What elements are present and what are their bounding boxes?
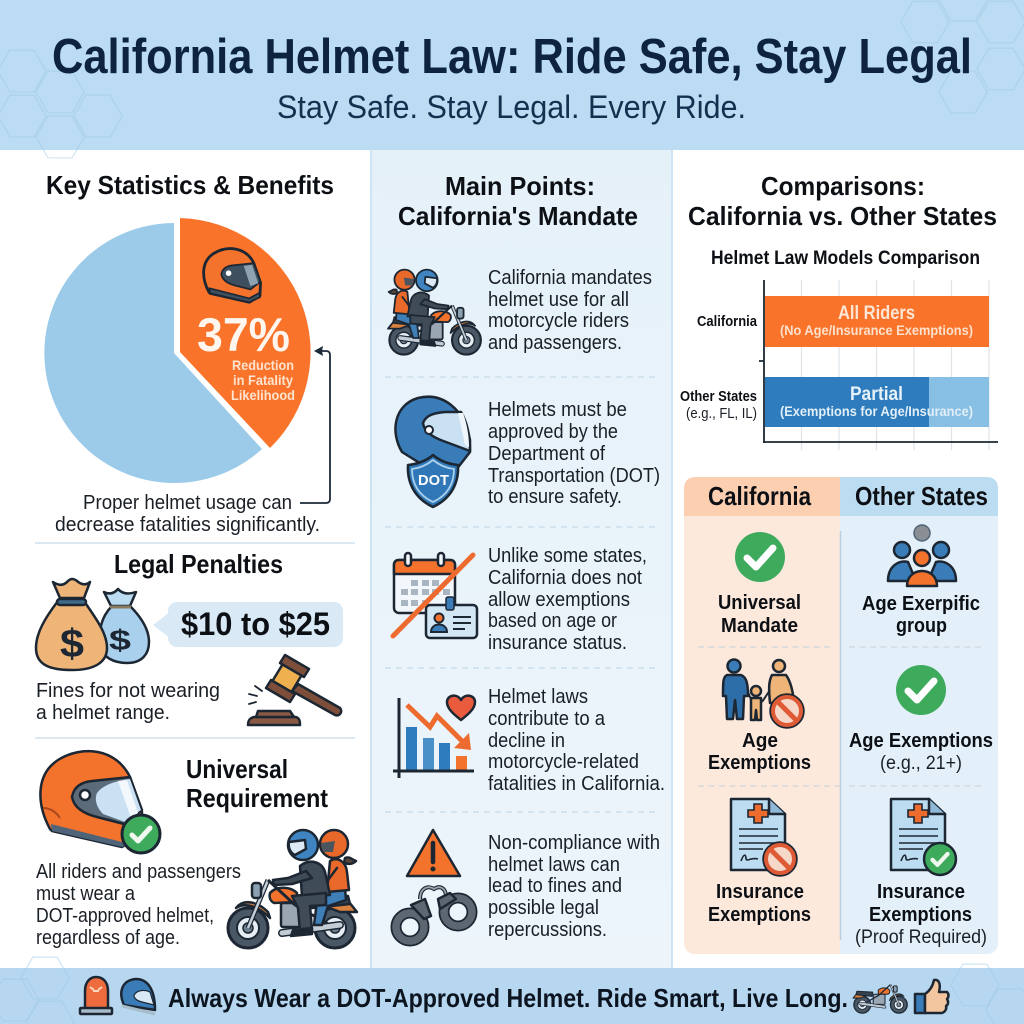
icon: money bags: $ [109, 625, 131, 657]
text: point 3: Unlike some states, [488, 545, 647, 567]
icon: motorcycle with riders [228, 830, 357, 948]
text: point 5: repercussions. [488, 919, 607, 941]
text: point 3: allow exemptions [488, 589, 630, 611]
label: insurance exemptions other states: (Proof Required) [855, 927, 987, 948]
stat caption: Reduction [232, 357, 294, 373]
text: point 5 [488, 832, 660, 941]
label: insurance exemptions other states: Exemptions [869, 904, 972, 926]
text: point 4: motorcycle-related [488, 751, 639, 773]
heading: main points: California's Mandate [398, 201, 638, 231]
label: insurance exemptions other states: Insurance [877, 881, 965, 903]
axis label: other states [680, 389, 757, 422]
label: age exemptions other states [849, 730, 993, 774]
text: fines description: Fines for not wearing [36, 680, 220, 702]
stat caption: in Fatality [233, 372, 293, 388]
icon: calendar and id card crossed out [393, 553, 477, 638]
icon: group of people [888, 525, 956, 586]
heading: comparisons: Comparisons: [761, 171, 925, 201]
text: point 2: to ensure safety. [488, 486, 622, 508]
text: point 4: fatalities in California. [488, 773, 665, 795]
label: age exemptions California: Age [742, 730, 778, 752]
callout: fine amount: $10 to $25 [181, 606, 330, 642]
text: point 2 [488, 399, 660, 508]
bar: California: (No Age/Insurance Exemptions) [780, 322, 973, 338]
text: helmet usage caption: decrease fatalities significantly. [55, 514, 320, 536]
text: point 1: helmet use for all [488, 289, 629, 311]
icon: helmet on pie [204, 249, 261, 302]
text: helmet usage caption: Proper helmet usage can [83, 492, 292, 514]
icon: thumbs up [915, 980, 948, 1013]
bar: other states: (Exemptions for Age/Insurance) [780, 403, 973, 419]
icon: insurance document with check [891, 799, 956, 875]
icon: blue helmet with DOT shield [395, 397, 470, 507]
icon: insurance document with prohibition sign [731, 799, 795, 874]
icon: warning triangle and handcuffs [396, 830, 472, 941]
text: helmet usage caption [55, 492, 320, 536]
heading: key statistics: Key Statistics & Benefits [46, 170, 334, 200]
heading: legal penalties: Legal Penalties [114, 549, 283, 579]
label: universal mandate: Universal [718, 592, 801, 614]
text: point 3: based on age or [488, 610, 617, 632]
text: universal requirement description: DOT-approved helmet, [36, 905, 214, 927]
icon: orange helmet with check [40, 751, 160, 853]
pie slice: remainder [44, 223, 262, 483]
text: universal requirement description: must wear a [36, 883, 136, 905]
stat: 37%: 37% [197, 308, 290, 361]
label: universal mandate: Mandate [721, 615, 798, 637]
icon: money bags [36, 579, 149, 670]
label: age exemptions California: Exemptions [708, 752, 811, 774]
subtitle: Stay Safe. Stay Legal. Every Ride. [277, 89, 746, 125]
axis label: other states: Other States [680, 389, 757, 405]
pie chart: 37 percent reduction [44, 218, 311, 483]
panel: center column background [371, 150, 672, 968]
icon: siren [80, 977, 112, 1014]
icon: motorcycle [853, 985, 907, 1013]
text: point 4: Helmet laws [488, 686, 588, 708]
callout: fine amount [153, 602, 343, 647]
heading: comparisons [688, 171, 997, 231]
text: point 5: lead to fines and [488, 875, 622, 897]
icon: gavel [248, 655, 341, 725]
heading: universal requirement: Universal [186, 754, 288, 784]
icon: blue helmet with DOT shield: DOT [418, 472, 449, 489]
label: age exemptions other states: (e.g., 21+) [880, 753, 962, 774]
footer message: Always Wear a DOT-Approved Helmet. Ride Smart, Live Long. [168, 983, 848, 1013]
label: age specific group [862, 593, 980, 637]
text: point 2: Helmets must be [488, 399, 627, 421]
text: point 5: helmet laws can [488, 854, 620, 876]
label: age exemptions California [708, 730, 811, 774]
label: universal mandate [718, 592, 801, 637]
icon: declining bar chart with heart [393, 696, 475, 778]
axis label: other states: (e.g., FL, IL) [686, 406, 757, 422]
text: fines description [36, 680, 220, 724]
chart title: Helmet Law Models Comparison [711, 248, 980, 269]
text: point 5: Non-compliance with [488, 832, 660, 854]
axis label: California: California [697, 314, 758, 330]
text: point 1: and passengers. [488, 332, 622, 354]
text: universal requirement description [36, 861, 241, 949]
panel: header banner [0, 0, 1024, 168]
bar chart: helmet law models [680, 280, 998, 450]
text: universal requirement description: All riders and passengers [36, 861, 241, 883]
text: point 1: motorcycle riders [488, 310, 629, 332]
label: age specific group: Age Exerpific [862, 593, 980, 615]
text: point 2: approved by the [488, 421, 618, 443]
heading: main points [398, 171, 638, 231]
text: point 4: contribute to a [488, 708, 606, 730]
stat caption: Likelihood [231, 387, 295, 403]
icon: green check [735, 532, 785, 582]
text: point 1 [488, 267, 652, 354]
icon: blue helmet [121, 979, 155, 1014]
icon: green check [896, 665, 946, 715]
pie slice: 37 percent [180, 218, 311, 448]
text: point 5: possible legal [488, 897, 599, 919]
heading: universal requirement: Requirement [186, 783, 328, 813]
label: insurance exemptions California: Insurance [716, 881, 804, 903]
heading: universal requirement [186, 754, 328, 813]
stat caption [231, 357, 295, 403]
bar: other states: Partial [850, 384, 903, 405]
bar: other states [765, 377, 989, 427]
text: universal requirement description: regardless of age. [36, 927, 180, 949]
arrow: caption to pie [300, 346, 330, 503]
text: fines description: a helmet range. [36, 702, 170, 724]
text: point 3: insurance status. [488, 632, 627, 654]
text: point 2: Transportation (DOT) [488, 465, 660, 487]
label: insurance exemptions California [708, 881, 811, 926]
label: insurance exemptions California: Exemptions [708, 904, 811, 926]
panel: comparison table [684, 477, 998, 954]
column header: California: California [708, 481, 811, 511]
label: age specific group: group [896, 615, 947, 637]
text: point 3: California does not [488, 567, 642, 589]
heading: comparisons: California vs. Other States [688, 201, 997, 231]
bar: California [765, 296, 989, 347]
column header: other states: Other States [855, 481, 988, 511]
panel: footer banner [0, 947, 1024, 1024]
text: point 1: California mandates [488, 267, 652, 289]
text: point 2: Department of [488, 443, 605, 465]
icon: motorcycle with two riders [388, 270, 481, 355]
heading: main points: Main Points: [445, 171, 595, 201]
icon: money bags: $ [60, 622, 84, 666]
text: point 4: decline in [488, 730, 565, 752]
label: age exemptions other states: Age Exemptions [849, 730, 993, 752]
text: point 3 [488, 545, 647, 654]
label: insurance exemptions other states [855, 881, 987, 948]
bar: California: All Riders [838, 303, 915, 324]
icon: family with prohibition sign [723, 660, 802, 726]
text: point 4 [488, 686, 665, 795]
